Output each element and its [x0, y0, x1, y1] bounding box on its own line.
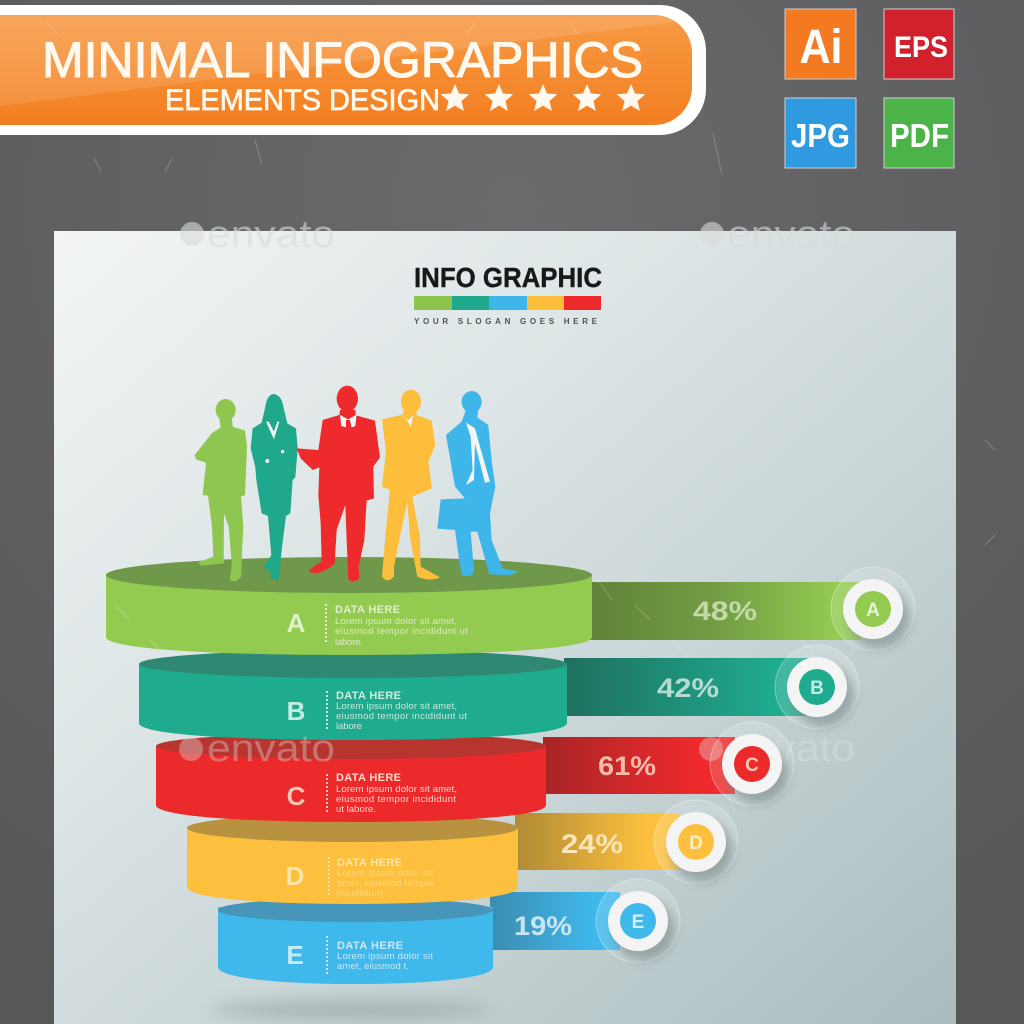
disc B: labore — [336, 721, 362, 732]
person: green man — [195, 399, 247, 581]
badge C — [710, 722, 794, 806]
disc D: DATA HERE — [337, 857, 402, 869]
panel: infographic card — [54, 231, 956, 1024]
bar E — [490, 892, 620, 950]
badge B: B — [810, 678, 824, 699]
badge C: C — [745, 755, 759, 776]
disc A: A — [287, 608, 306, 638]
watermarks: top row: envato — [727, 214, 855, 256]
disc C: ut labore. — [336, 804, 376, 815]
base shadow — [210, 1001, 490, 1019]
value B: 42% — [657, 673, 719, 703]
icon: EPS format — [884, 9, 954, 79]
disc C: DATA HERE — [336, 772, 401, 784]
badge D — [654, 800, 738, 884]
watermarks: top row: envato — [207, 214, 335, 256]
value D: 24% — [561, 829, 623, 859]
person: teal woman — [251, 394, 298, 580]
disc C: Lorem ipsum dolor sit amet, — [336, 784, 457, 795]
logo title: INFO GRAPHIC — [414, 262, 602, 293]
icon: JPG format — [785, 98, 856, 168]
decorative scratch lines — [46, 22, 995, 660]
icon: PDF format: PDF — [890, 117, 949, 154]
bar B — [564, 658, 810, 716]
disc E: Lorem ipsum dolor sit — [337, 951, 433, 962]
disc D: Lorem ipsum dolor sit — [337, 868, 433, 879]
logo colour bar — [414, 296, 601, 310]
badge A — [831, 567, 915, 651]
disc C: eiusmod tempor incididunt — [336, 794, 456, 805]
watermarks: middle row: envato — [727, 728, 855, 770]
person: blue man — [437, 391, 518, 576]
person details — [265, 414, 490, 485]
disc B: DATA HERE — [336, 690, 401, 702]
disc D: amet, eiusmod tempor — [337, 878, 435, 889]
rating stars — [441, 84, 645, 111]
disc A: labore. — [335, 637, 363, 648]
disc C: C — [287, 781, 306, 811]
logo: info graphic — [414, 262, 602, 326]
disc B: Lorem ipsum dolor sit amet, — [336, 701, 457, 712]
disc E: DATA HERE — [337, 940, 403, 952]
watermarks: middle row — [179, 728, 855, 770]
disc E: E — [286, 940, 304, 970]
bar A — [589, 582, 861, 640]
icon: Ai format: Ai — [800, 21, 842, 74]
disc E: amet, eiusmod t. — [337, 961, 409, 972]
disc A: eiusmod tempor incididunt ut — [335, 626, 468, 637]
disc D: incididunt — [337, 888, 383, 899]
badge A: A — [866, 600, 880, 621]
disc B: B — [287, 696, 305, 726]
disc C — [156, 733, 546, 822]
person: yellow man — [382, 390, 440, 580]
icon: JPG format: JPG — [791, 117, 850, 154]
icon: Ai format — [785, 9, 856, 79]
banner subtitle: ELEMENTS DESIGN — [165, 84, 440, 117]
logo slogan: YOUR SLOGAN GOES HERE — [414, 317, 598, 326]
badge B — [775, 645, 859, 729]
badge E — [596, 879, 680, 963]
badge E: E — [632, 912, 644, 933]
icon: EPS format: EPS — [894, 31, 948, 64]
disc A: DATA HERE — [335, 604, 400, 616]
disc D: D — [286, 861, 304, 891]
disc B — [139, 650, 567, 740]
silhouettes: business team — [195, 386, 518, 581]
bar D — [515, 813, 680, 870]
watermarks: top row — [180, 214, 855, 256]
badge D: D — [689, 833, 703, 854]
disc D — [187, 814, 518, 904]
icon: PDF format — [884, 98, 954, 168]
disc A — [106, 557, 592, 655]
person: red man — [297, 386, 380, 581]
value A: 48% — [693, 596, 757, 626]
value E: 19% — [514, 911, 572, 941]
disc A: Lorem ipsum dolor sit amet, — [335, 616, 457, 627]
watermarks: middle row: envato — [207, 728, 335, 770]
banner — [0, 5, 706, 135]
bar C — [543, 737, 735, 794]
value C: 61% — [598, 751, 656, 781]
disc B: eiusmod tempor incididunt ut — [336, 711, 467, 722]
disc E — [218, 898, 493, 984]
banner title: MINIMAL INFOGRAPHICS — [42, 32, 643, 88]
